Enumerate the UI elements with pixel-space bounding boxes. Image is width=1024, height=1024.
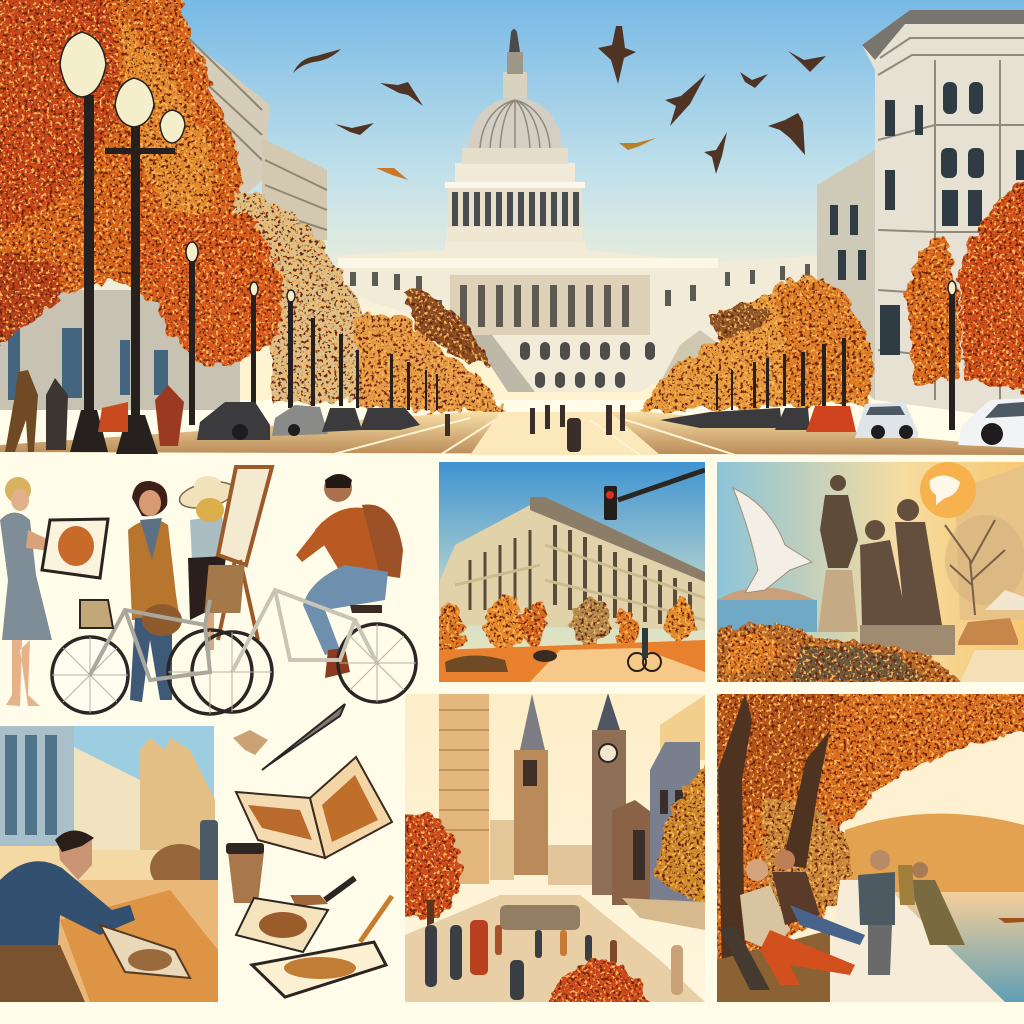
tree trunks <box>718 694 830 975</box>
pen <box>262 704 345 770</box>
panel: statue memorial <box>717 462 1024 682</box>
panel: cyclists and artists <box>0 467 416 714</box>
pens and marker <box>290 878 392 942</box>
tree trunk <box>427 900 434 926</box>
autumn trees row <box>436 598 696 654</box>
bicycle rider <box>628 628 661 671</box>
bench and seated people <box>720 850 865 990</box>
panel: capitol avenue scene <box>0 0 1024 455</box>
clock tower <box>592 693 626 895</box>
birds flock <box>293 26 826 180</box>
leaf <box>233 730 268 755</box>
traffic light <box>604 470 705 520</box>
coffee cup <box>226 843 264 903</box>
crowd <box>425 905 683 1000</box>
artist man <box>0 830 135 1002</box>
panel: sketching artist <box>0 726 218 1002</box>
right ornate buildings <box>817 10 1024 420</box>
white dove <box>733 488 812 593</box>
street lamps <box>60 32 956 454</box>
woman holding sketchboard <box>0 477 108 706</box>
cyclist <box>204 474 403 678</box>
autumn shrubs <box>717 621 960 682</box>
kayak on lake <box>998 918 1024 923</box>
road and sidewalk <box>0 412 1024 455</box>
foreground autumn bush <box>548 958 650 1002</box>
panel: grand building with traffic light <box>436 462 705 682</box>
promenade <box>405 895 705 1002</box>
panel: lakeside park <box>717 694 1024 1002</box>
parked cars <box>98 398 1024 448</box>
sketch papers <box>100 925 190 978</box>
standing people <box>858 850 965 975</box>
cafe awning <box>622 898 705 930</box>
woman with scarf <box>128 481 182 702</box>
sketch card <box>236 898 328 952</box>
pedestrians <box>5 370 625 452</box>
bell tower <box>514 694 548 875</box>
standing statue <box>818 475 858 632</box>
open sketchbook <box>236 757 392 858</box>
victorian buildings <box>612 742 700 905</box>
autumn trees <box>405 763 705 920</box>
sky <box>0 0 1024 400</box>
right orange trees <box>640 179 1024 412</box>
seated and standing statue group <box>860 499 955 655</box>
left classical building <box>0 0 327 410</box>
woman in sun hat <box>177 476 237 650</box>
easel <box>218 467 272 640</box>
bicycles <box>52 590 416 714</box>
capitol dome <box>445 29 585 242</box>
panel: city street with towers <box>405 694 705 1002</box>
road <box>439 640 705 682</box>
boardwalk <box>800 880 1005 1002</box>
bare tree <box>945 515 1024 615</box>
parked car <box>958 618 1018 645</box>
left orange trees <box>0 0 505 412</box>
tree canopy <box>700 680 1024 1010</box>
capitol building <box>338 29 828 392</box>
panel: sketching supplies <box>226 704 392 997</box>
sketch card <box>252 942 386 997</box>
